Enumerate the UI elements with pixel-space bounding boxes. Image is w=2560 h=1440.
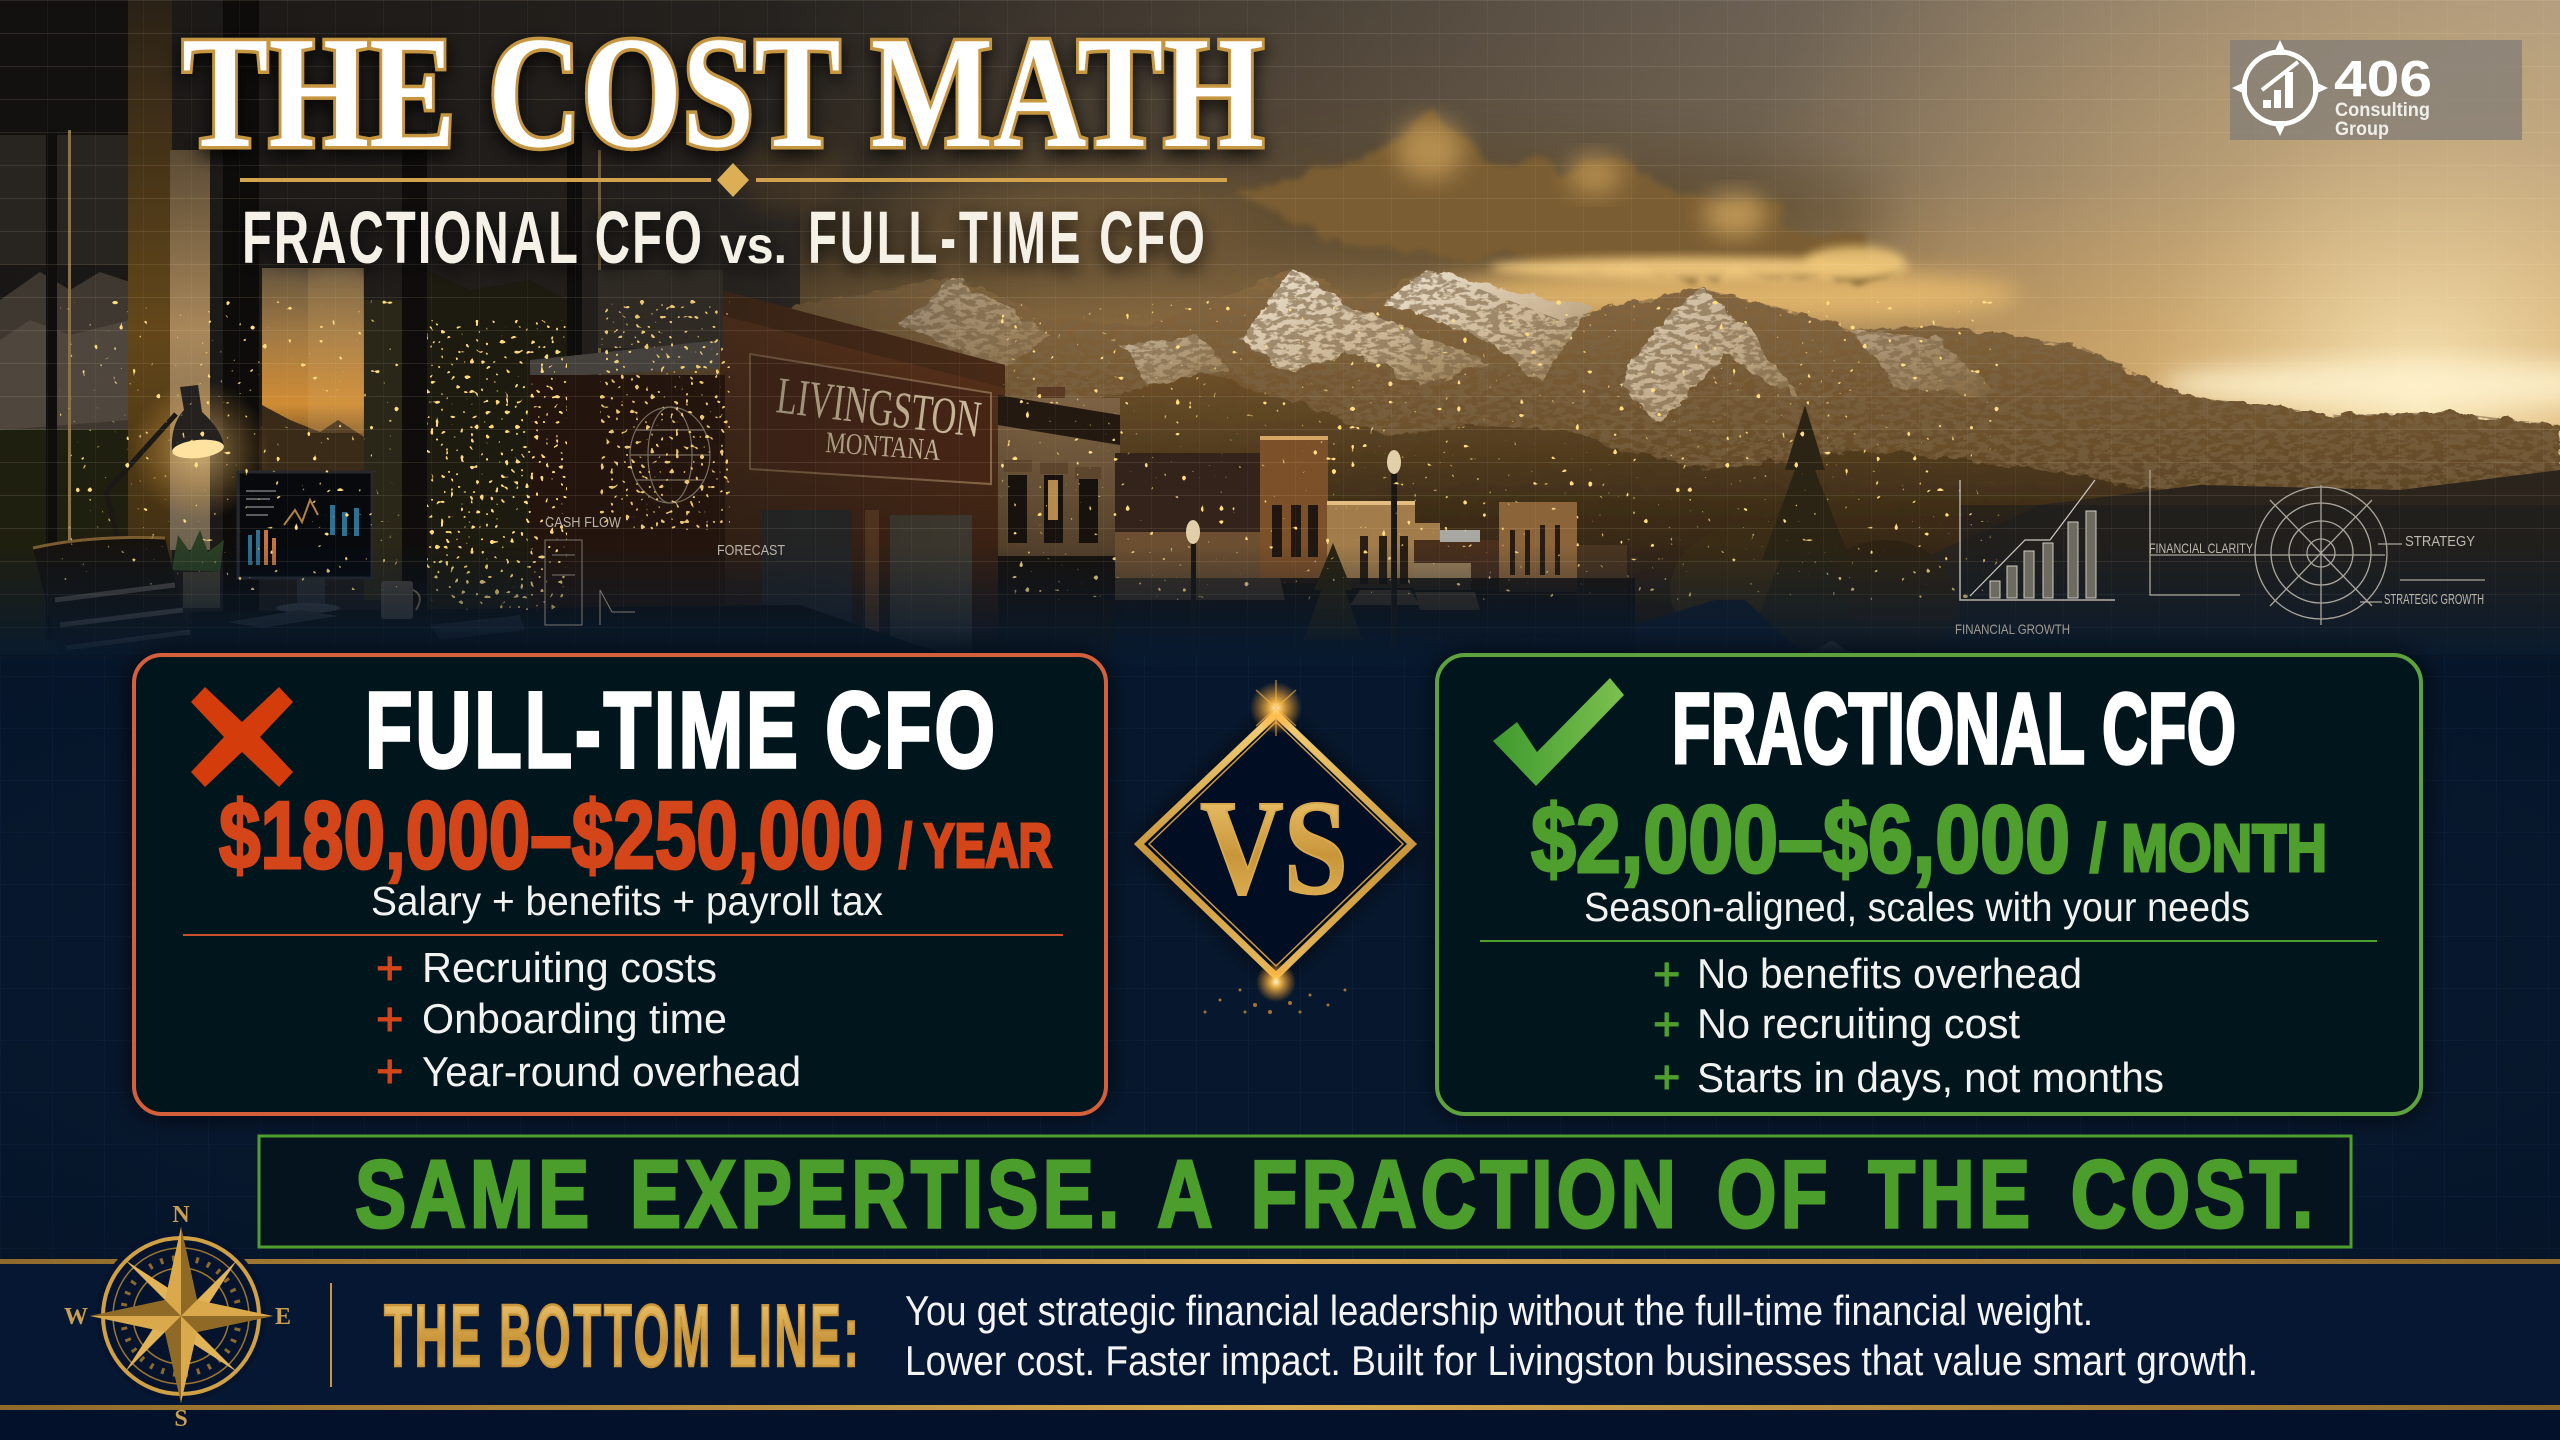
subtitle: FRACTIONAL CFO	[242, 197, 702, 280]
logo: 406 Consulting Group: 406	[2334, 50, 2432, 107]
title divider with diamond	[240, 163, 1227, 197]
logo: 406 Consulting Group: Consulting	[2335, 100, 2430, 121]
text: bottom line statement: Lower cost. Faster impact. Built for Livingston businesses that value smart growth.	[905, 1337, 2258, 1384]
list: full-time add-ons: +	[376, 1044, 403, 1097]
title: THE COST MATH	[182, 3, 1264, 181]
blueprint sketch: cash flow	[545, 514, 785, 625]
photo: Livingston sunset scene	[0, 0, 2560, 665]
sign: Livingston Montana: LIVINGSTON	[774, 367, 984, 449]
list: full-time add-ons: +	[376, 992, 403, 1045]
Livingston brick building	[720, 290, 1005, 655]
icon: compass with bar chart	[2232, 40, 2328, 136]
list: fractional benefits	[1653, 947, 2164, 1103]
icon: green check	[1493, 678, 1624, 786]
blueprint sketch: strategy target: FINANCIAL CLARITY	[2149, 540, 2254, 556]
subtitle: vs.	[720, 217, 787, 275]
gold sparkles	[60, 300, 2000, 610]
list: fractional benefits: +	[1653, 947, 1680, 1000]
mountains	[600, 260, 2560, 640]
grid overlay	[0, 0, 2560, 660]
list: full-time add-ons: Onboarding time	[422, 995, 727, 1042]
blueprint sketch: strategy target: STRATEGIC GROWTH	[2384, 591, 2484, 608]
text: bottom line statement	[905, 1287, 2258, 1384]
VS badge: VS	[1200, 773, 1348, 923]
price: fractional: / MONTH	[2090, 811, 2327, 886]
description: fractional cost: Season-aligned, scales with your needs	[1584, 884, 2250, 930]
town buildings	[998, 387, 1635, 660]
list: fractional benefits: No recruiting cost	[1697, 1000, 2020, 1047]
heading: the bottom line: THE BOTTOM LINE:	[384, 1287, 859, 1385]
compass letters: E	[275, 1304, 291, 1330]
text: bottom line statement: You get strategic financial leadership without the full-time financial weight.	[905, 1287, 2093, 1334]
list: fractional benefits: No benefits overhead	[1697, 950, 2082, 997]
logo: 406 Consulting Group: Group	[2335, 119, 2389, 140]
desk lamp	[106, 380, 270, 540]
icon: compass rose	[90, 1227, 273, 1403]
list: fractional benefits: +	[1653, 1050, 1680, 1103]
band: bottom line	[0, 1202, 2560, 1440]
list: full-time add-ons	[376, 941, 801, 1097]
fade to navy	[0, 545, 2560, 665]
blueprint sketch: growth chart: FINANCIAL GROWTH	[1955, 621, 2070, 637]
blueprint sketch: growth chart	[1955, 480, 2115, 637]
clouds	[735, 115, 2560, 409]
price: fractional: $2,000–$6,000	[1531, 786, 2070, 893]
logo: 406 Consulting Group	[2230, 40, 2522, 140]
sign: Livingston Montana: MONTANA	[825, 426, 942, 467]
blueprint sketch: strategy target: STRATEGY	[2405, 533, 2475, 550]
VS badge	[1139, 680, 1412, 1014]
office interior reflection	[0, 0, 1040, 660]
icon: globe sketch	[630, 407, 710, 503]
office chair	[33, 537, 195, 660]
heading: fractional CFO: FRACTIONAL CFO	[1672, 672, 2236, 785]
compass letters: N	[172, 1202, 190, 1228]
right foreground landscape	[1920, 470, 2560, 660]
street	[1520, 600, 1810, 660]
subtitle: FULL-TIME CFO	[808, 197, 1205, 280]
icon: red X	[191, 687, 293, 787]
price: full-time: / YEAR	[899, 812, 1052, 881]
navy grid	[0, 655, 2560, 1265]
subtitle	[242, 197, 1205, 280]
compass letters	[64, 1202, 291, 1432]
panel: fractional CFO	[1437, 655, 2421, 1114]
compass letters: S	[174, 1406, 188, 1432]
street lamps	[1186, 450, 1401, 655]
panel: full-time CFO	[134, 655, 1106, 1114]
desk and computer	[172, 472, 960, 660]
small pine	[1304, 543, 1362, 640]
description: full-time cost: Salary + benefits + payroll tax	[371, 878, 883, 924]
banner: same expertise: SAME EXPERTISE. A FRACTION OF THE COST.	[355, 1141, 2313, 1248]
blueprint sketch: cash flow: FORECAST	[717, 542, 785, 559]
price: full-time: $180,000–$250,000	[219, 782, 883, 889]
list: full-time add-ons: +	[376, 941, 403, 994]
sign: Livingston Montana	[750, 354, 991, 484]
blueprint sketch: strategy target	[2149, 470, 2485, 625]
pine tree	[1670, 405, 1955, 660]
sky	[0, 0, 2560, 660]
list: full-time add-ons: Recruiting costs	[422, 944, 717, 991]
compass letters: W	[64, 1304, 88, 1330]
list: fractional benefits: +	[1653, 997, 1680, 1050]
list: full-time add-ons: Year-round overhead	[422, 1048, 801, 1095]
list: fractional benefits: Starts in days, not months	[1697, 1054, 2164, 1101]
blueprint sketch: cash flow: CASH FLOW	[545, 514, 622, 531]
heading: full-time CFO: FULL-TIME CFO	[365, 669, 995, 790]
